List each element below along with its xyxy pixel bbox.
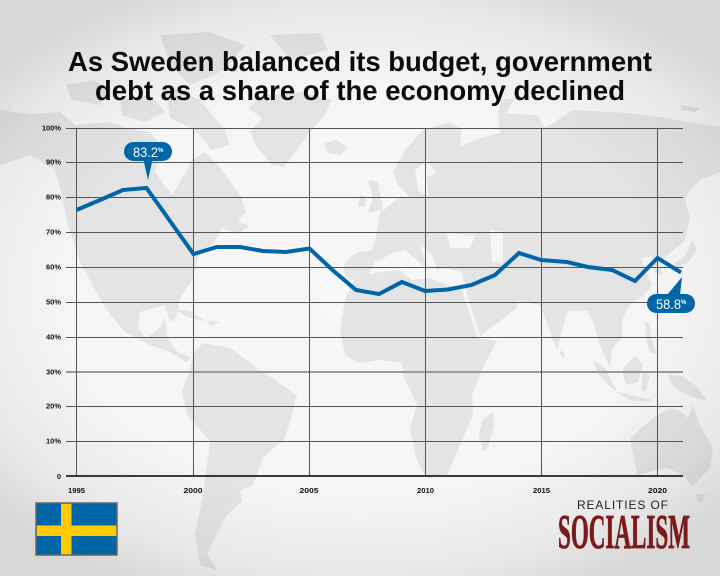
callout: 83.2% peak: 83.2 bbox=[133, 145, 158, 160]
x-axis labels: 2010 bbox=[417, 486, 434, 495]
x-axis labels bbox=[68, 486, 667, 495]
map: Africa bbox=[340, 270, 497, 478]
map: New Guinea bbox=[668, 375, 707, 401]
map: Novaya Zemlya and Arctic islands bbox=[498, 98, 700, 118]
map: Indonesia bbox=[593, 355, 653, 402]
y-axis labels: 0 bbox=[57, 472, 61, 481]
y-axis labels: 60% bbox=[46, 262, 61, 272]
x-axis labels: 2020 bbox=[648, 486, 667, 495]
map: Philippines bbox=[645, 321, 657, 355]
map: Eurasia bbox=[343, 110, 720, 368]
callout: 58.8% latest: % bbox=[681, 300, 687, 306]
map: Greenland bbox=[248, 92, 332, 167]
map: Australia bbox=[630, 405, 713, 486]
callout: 58.8% latest: 58.8 bbox=[656, 297, 681, 312]
map: Canadian Arctic islands bbox=[66, 32, 328, 150]
callout: 83.2% peak: % bbox=[158, 148, 164, 154]
data line: debt share of GDP bbox=[76, 188, 681, 294]
y-axis labels: 70% bbox=[46, 228, 61, 236]
title bbox=[68, 46, 652, 106]
y-axis labels: 90% bbox=[46, 158, 61, 166]
y-axis labels: 10% bbox=[46, 436, 61, 446]
y-axis labels: 30% bbox=[46, 368, 61, 376]
x-axis labels: 2015 bbox=[533, 486, 550, 495]
map: Madagascar bbox=[479, 411, 494, 451]
map: Iceland bbox=[324, 140, 348, 155]
chart grid lines bbox=[66, 128, 683, 476]
title: As Sweden balanced its budget, government bbox=[68, 46, 652, 77]
y-axis labels: 20% bbox=[46, 402, 61, 410]
map: South America bbox=[182, 343, 297, 570]
x-axis labels: 1995 bbox=[68, 486, 85, 495]
map: Sri Lanka bbox=[560, 348, 565, 358]
y-axis labels bbox=[42, 124, 61, 481]
icon: Swedish flag bbox=[36, 503, 117, 555]
x-axis labels: 2005 bbox=[300, 486, 318, 495]
x-axis labels: 2000 bbox=[184, 486, 202, 495]
map: North America bbox=[0, 110, 250, 362]
y-axis labels: 80% bbox=[46, 192, 61, 202]
map: Japan bbox=[674, 240, 697, 268]
title: debt as a share of the economy declined bbox=[95, 75, 625, 106]
callout: 83.2% peak bbox=[124, 142, 172, 180]
y-axis labels: 50% bbox=[46, 298, 61, 306]
y-axis labels: 40% bbox=[46, 332, 61, 342]
map: Cuba and Caribbean bbox=[173, 309, 220, 326]
logo: Realities of Socialism: REALITIES OF bbox=[577, 498, 668, 512]
map: Tasmania bbox=[696, 494, 705, 503]
y-axis labels: 100% bbox=[42, 124, 61, 132]
callout: 58.8% latest bbox=[647, 277, 695, 313]
map: British Isles bbox=[358, 180, 383, 213]
